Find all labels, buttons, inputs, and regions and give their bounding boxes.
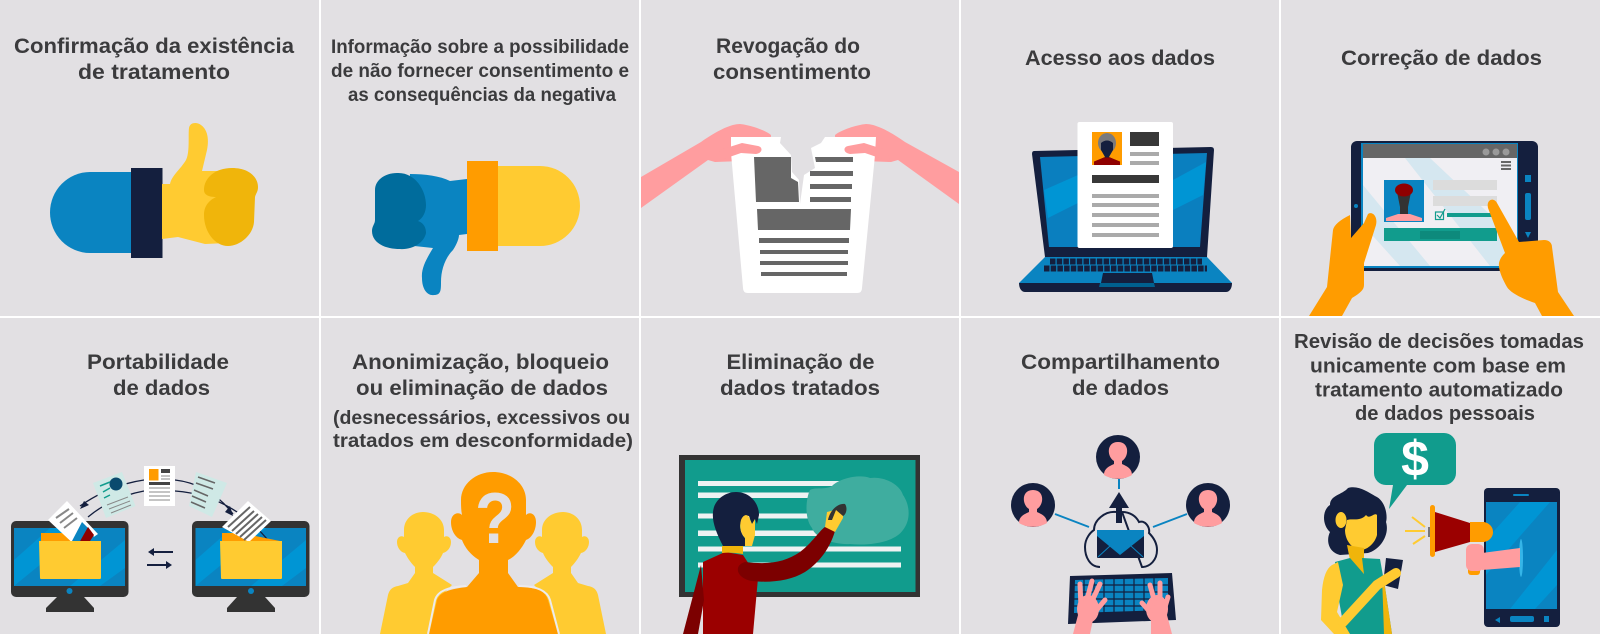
icon: left person [380, 512, 452, 634]
heading: anonimização [352, 351, 609, 400]
panel: compartilhamento de dados [961, 318, 1279, 634]
icon: speech bubble with dollar sign [1374, 431, 1456, 509]
icon: tablet with hands [1309, 141, 1574, 316]
icon: left teal document [93, 472, 136, 518]
panel: correção de dados [1281, 0, 1600, 316]
heading: confirmação: de tratamento [78, 61, 230, 84]
icon: right person [534, 512, 606, 634]
heading: revisão [1294, 330, 1584, 425]
panel: revogação do consentimento [641, 0, 959, 316]
heading: revogação: consentimento [713, 61, 871, 84]
icon: chalkboard [679, 455, 920, 597]
icon: central anonymous person [428, 472, 559, 634]
heading: confirmação: Confirmação da existência [14, 35, 294, 58]
text: parenthetical note [333, 408, 633, 452]
icon: top contact [1096, 435, 1140, 479]
heading: revisão: unicamente com base em [1310, 354, 1566, 378]
icon: woman with phone [1321, 487, 1403, 634]
heading: revisão: tratamento automatizado [1315, 378, 1563, 402]
heading: correção: Correção de dados [1341, 47, 1542, 70]
icon: smartphone [1484, 488, 1560, 627]
icon: thumbs up [50, 123, 258, 258]
icon: right hand [835, 124, 959, 204]
panel: portabilidade de dados [0, 318, 319, 634]
icon: megaphone [1405, 505, 1520, 575]
heading: informação: de não fornecer consentimento e [331, 61, 629, 82]
heading: portabilidade: de dados [113, 377, 210, 400]
heading: portabilidade: Portabilidade [87, 351, 229, 374]
heading: revogação [713, 35, 871, 84]
arrow: upload [1109, 492, 1129, 523]
heading: revisão: Revisão de decisões tomadas [1294, 330, 1584, 353]
text: parenthetical note: (desnecessários, excessivos ou [333, 408, 630, 429]
icon: left contact [1011, 483, 1055, 527]
heading: eliminação: Eliminação de [726, 351, 874, 374]
heading: acesso: Acesso aos dados [1025, 47, 1215, 70]
icon: top document [144, 466, 175, 506]
heading: eliminação: dados tratados [720, 377, 880, 400]
icon: speech bubble with dollar sign: $ [1401, 431, 1429, 487]
arrow: exchange right [147, 561, 172, 569]
icon: left folder with chart document [39, 501, 101, 579]
heading: informação [331, 37, 629, 106]
heading: revogação: Revogação do [716, 35, 860, 58]
heading: revisão: de dados pessoais [1355, 402, 1535, 425]
icon: right folder with text document [220, 501, 282, 579]
panel: confirmação da existência de tratamento [0, 0, 319, 316]
icon: cloud with envelope [1085, 512, 1157, 567]
heading: confirmação [14, 35, 294, 84]
panel: informação sobre a possibilidade de não fornecer consentimento [321, 0, 639, 316]
icon: right monitor [192, 521, 310, 612]
text: question mark: ? [475, 479, 515, 559]
connector lines [1055, 479, 1187, 527]
icon: thumbs down [372, 161, 580, 295]
icon: right contact [1186, 483, 1230, 527]
icon: transfer arcs [80, 480, 268, 540]
heading: informação: as consequências da negativa [348, 85, 616, 106]
heading: compartilhamento: de dados [1072, 377, 1169, 400]
text: parenthetical note: tratados em desconformidade) [333, 431, 633, 452]
heading: portabilidade [87, 351, 229, 400]
icon: left hand [641, 124, 771, 208]
heading: informação: Informação sobre a possibilidade [331, 37, 629, 58]
icon: laptop with document [1019, 122, 1232, 292]
heading: compartilhamento [1021, 351, 1220, 400]
icon: torn document [715, 137, 891, 293]
arrow: exchange left [148, 548, 173, 556]
heading: anonimização: Anonimização, bloqueio [352, 351, 609, 374]
heading: compartilhamento: Compartilhamento [1021, 351, 1220, 374]
arrow: right arrowhead [225, 506, 233, 516]
panel: anonimização, bloqueio ou eliminação [321, 318, 639, 634]
icon: person erasing board [683, 492, 846, 634]
icon: left monitor [11, 521, 128, 612]
heading: anonimização: ou eliminação de dados [356, 377, 608, 400]
panel: acesso aos dados [961, 0, 1279, 316]
icon: right teal document [189, 472, 227, 517]
arrow: left arrowhead [80, 501, 89, 509]
panel: eliminação de dados tratados [641, 318, 959, 634]
panel: revisão de decisões automatizadas [1281, 318, 1600, 634]
heading: eliminação [720, 351, 880, 400]
icon: keyboard with hands [1068, 573, 1176, 634]
